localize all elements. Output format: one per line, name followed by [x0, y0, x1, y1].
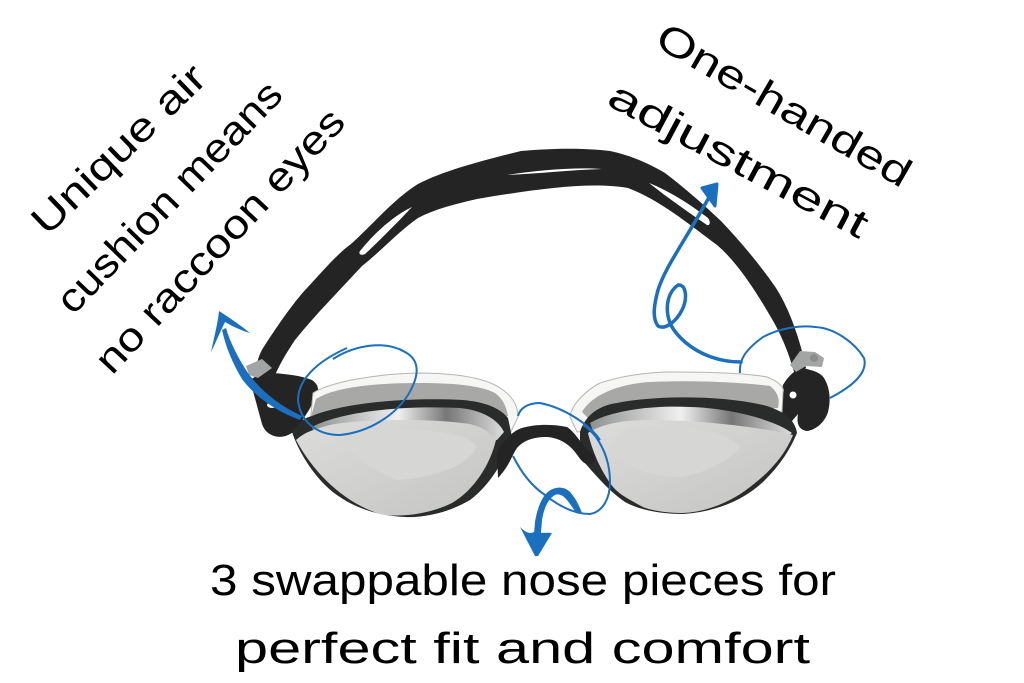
- text: air cushion: cushion means: [48, 72, 291, 322]
- icon: circle around air cushion: [298, 345, 417, 435]
- right lens: [570, 372, 797, 514]
- arrow: nose pieces: [520, 488, 582, 556]
- text: air cushion: no raccoon eyes: [86, 100, 354, 382]
- arrow: adjustment: [654, 184, 741, 362]
- callout: air cushion: [23, 56, 417, 435]
- text: air cushion: [23, 56, 354, 382]
- right buckle: [778, 351, 830, 431]
- text: adjustment: adjustment: [601, 73, 876, 247]
- text: air cushion: Unique air: [23, 56, 215, 243]
- icon: circle around nose bridge: [513, 403, 610, 514]
- text: adjustment: [601, 15, 919, 247]
- arrow: air cushion: [211, 311, 302, 420]
- text: nose pieces: 3 swappable nose pieces for: [210, 556, 836, 605]
- left lens: [292, 373, 518, 517]
- nose bridge: [497, 425, 595, 478]
- icon: circle around buckle: [740, 326, 865, 398]
- callout: adjustment: [601, 15, 919, 398]
- head strap: [254, 149, 806, 386]
- callout: nose pieces: perfect fit and comfort: [235, 624, 810, 673]
- text: adjustment: One-handed: [648, 15, 919, 196]
- goggles photo: [246, 149, 830, 517]
- callout: nose pieces: [210, 403, 836, 673]
- left buckle: [246, 359, 318, 437]
